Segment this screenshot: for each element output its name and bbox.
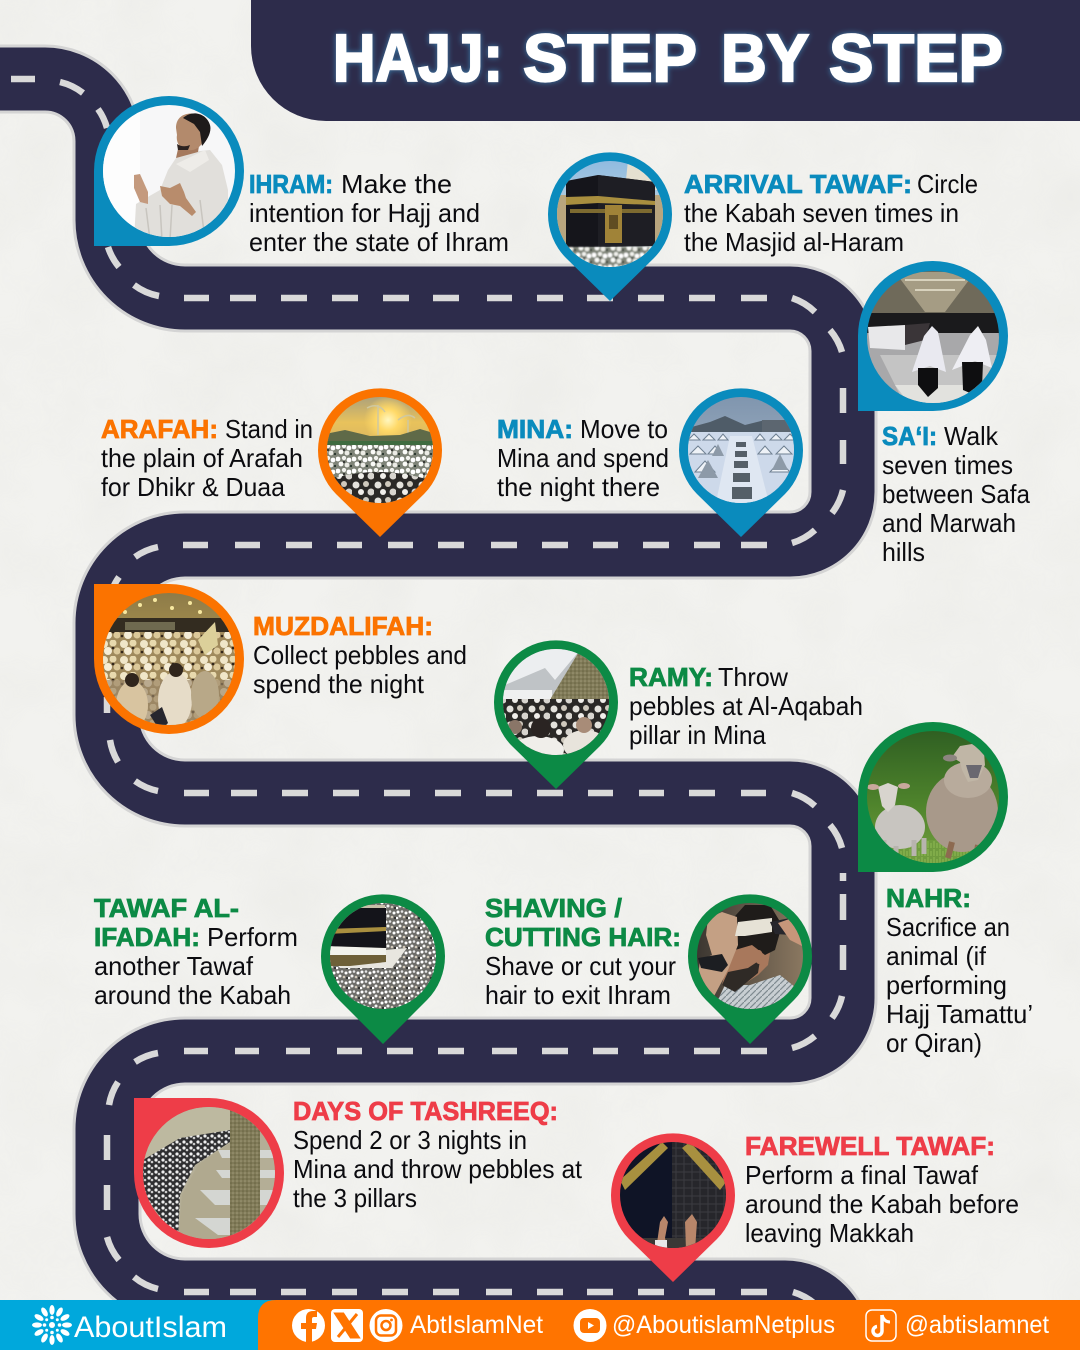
text: Mina: the night there — [497, 472, 660, 502]
text: Sa'i: seven times — [882, 450, 1013, 480]
text: Farewell Tawaf: Perform a final Tawaf — [745, 1160, 979, 1190]
text: Tawaf al-Ifadah: IFADAH: — [94, 922, 200, 952]
icon: instagram — [370, 1309, 402, 1342]
text: Nahr: animal (if — [886, 941, 987, 971]
pin: Ramy photo — [494, 640, 618, 789]
text: Arafah: for Dhikr & Duaa — [101, 472, 286, 502]
text: Ihram: IHRAM: — [249, 169, 333, 199]
title text: STEP — [523, 21, 697, 96]
icon: X — [331, 1309, 363, 1342]
text: Arrival Tawaf — [684, 169, 978, 257]
text: Shaving: SHAVING / — [485, 893, 622, 923]
text: Days of Tashreeq: Mina and throw pebbles at — [293, 1154, 583, 1184]
pin: Sa'i photo — [858, 261, 1008, 411]
text: Days of Tashreeq: DAYS OF TASHREEQ: — [293, 1096, 558, 1126]
text: Shaving: hair to exit Ihram — [485, 980, 671, 1010]
footer bar — [0, 1300, 1080, 1350]
text: Tawaf al-Ifadah: another Tawaf — [94, 951, 254, 981]
icon: AboutIslam flower logo — [32, 1305, 72, 1345]
text: Nahr — [886, 883, 1033, 1058]
text: Ramy: pillar in Mina — [629, 720, 766, 750]
footer: brand section — [0, 1300, 275, 1350]
text: Ihram — [249, 169, 509, 257]
text: Nahr: performing — [886, 970, 1007, 1000]
text: Arafah: ARAFAH: — [101, 414, 218, 444]
text: Nahr: Sacrifice an — [886, 912, 1010, 942]
icon: tiktok — [866, 1310, 896, 1341]
text: Arafah: the plain of Arafah — [101, 443, 303, 473]
text: Farewell Tawaf — [745, 1131, 1019, 1248]
text: Mina: Mina and spend — [497, 443, 669, 473]
text: Arafah: Stand in — [225, 414, 313, 444]
text: Ramy: RAMY: — [629, 662, 713, 692]
handle: abtislamnet: @abtislamnet — [905, 1311, 1049, 1339]
step: Ramy — [494, 640, 863, 789]
text: Nahr: Hajj Tamattu’ — [886, 999, 1033, 1029]
text: Arrival Tawaf: Circle — [917, 169, 978, 199]
pin: Arafah photo — [318, 388, 442, 537]
text: Shaving: Shave or cut your — [485, 951, 676, 981]
text: Nahr: or Qiran) — [886, 1028, 982, 1058]
text: Tawaf al-Ifadah: Perform — [207, 922, 298, 952]
text: Sa'i: and Marwah — [882, 508, 1016, 538]
pin: Kaaba crowd photo — [321, 894, 445, 1044]
text: Tawaf al-Ifadah — [94, 893, 298, 1010]
winding road — [0, 79, 843, 1345]
text: Sa'i — [882, 421, 1030, 567]
text: Arrival Tawaf: ARRIVAL TAWAF: — [684, 169, 912, 199]
text: Mina — [497, 414, 669, 502]
handle: AboutislamNetplus: @AboutislamNetplus — [612, 1311, 835, 1339]
pin: Mina photo — [679, 388, 803, 537]
text: Ramy: Throw — [718, 662, 788, 692]
text: Nahr: NAHR: — [886, 883, 971, 913]
icon: facebook — [292, 1309, 325, 1342]
step: Farewell Tawaf — [611, 1131, 1019, 1282]
text: Days of Tashreeq: the 3 pillars — [293, 1183, 417, 1213]
text: Arrival Tawaf: the Masjid al-Haram — [684, 227, 904, 257]
text: Mina: Move to — [580, 414, 668, 444]
text: Sa'i: Walk — [944, 421, 999, 451]
text: Sa'i: between Safa — [882, 479, 1030, 509]
text: Tawaf al-Ifadah: around the Kabah — [94, 980, 291, 1010]
text: Ramy: pebbles at Al-Aqabah — [629, 691, 863, 721]
step: Sa'i — [858, 261, 1030, 567]
title text — [333, 21, 1003, 96]
text: Mina: MINA: — [497, 414, 573, 444]
step: Ihram — [94, 96, 509, 257]
pin: hair cut photo — [688, 894, 812, 1044]
text: Muzdalifah: Collect pebbles and — [253, 640, 467, 670]
text: Shaving — [485, 893, 681, 1010]
text: Muzdalifah — [253, 611, 467, 699]
text: Arafah — [101, 414, 313, 502]
text: Shaving: CUTTING HAIR: — [485, 922, 681, 952]
text: Ihram: Make the — [341, 169, 452, 199]
step: Arafah — [101, 388, 442, 537]
title text: BY — [721, 21, 809, 96]
text: Muzdalifah: spend the night — [253, 669, 425, 699]
text: Ihram: intention for Hajj and — [249, 198, 480, 228]
brand name: AboutIslam — [74, 1311, 227, 1344]
pin: Kaaba close-up photo — [611, 1133, 735, 1282]
pin: sheep photo — [858, 722, 1008, 872]
title banner — [251, 0, 1080, 121]
text: Farewell Tawaf: around the Kabah before — [745, 1189, 1019, 1219]
handle: AbtIslamNet: AbtIslamNet — [410, 1311, 543, 1339]
text: Tawaf al-Ifadah: TAWAF AL- — [94, 893, 239, 923]
pin: Kaaba photo — [548, 152, 672, 301]
text: Farewell Tawaf: leaving Makkah — [745, 1218, 914, 1248]
step: Muzdalifah — [94, 584, 467, 734]
text: Arrival Tawaf: the Kabah seven times in — [684, 198, 959, 228]
pin: Jamarat photo — [134, 1098, 284, 1248]
text: Sa'i: hills — [882, 537, 925, 567]
footer: social section — [258, 1300, 1080, 1350]
pin: Muzdalifah photo — [94, 584, 244, 734]
step: Nahr — [858, 722, 1033, 1058]
text: Sa'i: SA‘I: — [882, 421, 937, 451]
pin: Ihram photo — [94, 96, 244, 246]
text: Farewell Tawaf: FAREWELL TAWAF: — [745, 1131, 995, 1161]
step: Tawaf al-Ifadah — [94, 893, 445, 1044]
step: Days of Tashreeq — [134, 1096, 583, 1248]
step: Arrival Tawaf — [548, 152, 978, 301]
text: Days of Tashreeq: Spend 2 or 3 nights in — [293, 1125, 527, 1155]
text: Ihram: enter the state of Ihram — [249, 227, 509, 257]
step: Shaving — [485, 893, 812, 1044]
icon: youtube — [574, 1309, 606, 1342]
title text: HAJJ: — [333, 21, 503, 96]
text: Muzdalifah: MUZDALIFAH: — [253, 611, 433, 641]
text: Ramy — [629, 662, 863, 750]
text: Days of Tashreeq — [293, 1096, 583, 1213]
step: Mina — [497, 388, 803, 537]
title text: STEP — [829, 21, 1003, 96]
